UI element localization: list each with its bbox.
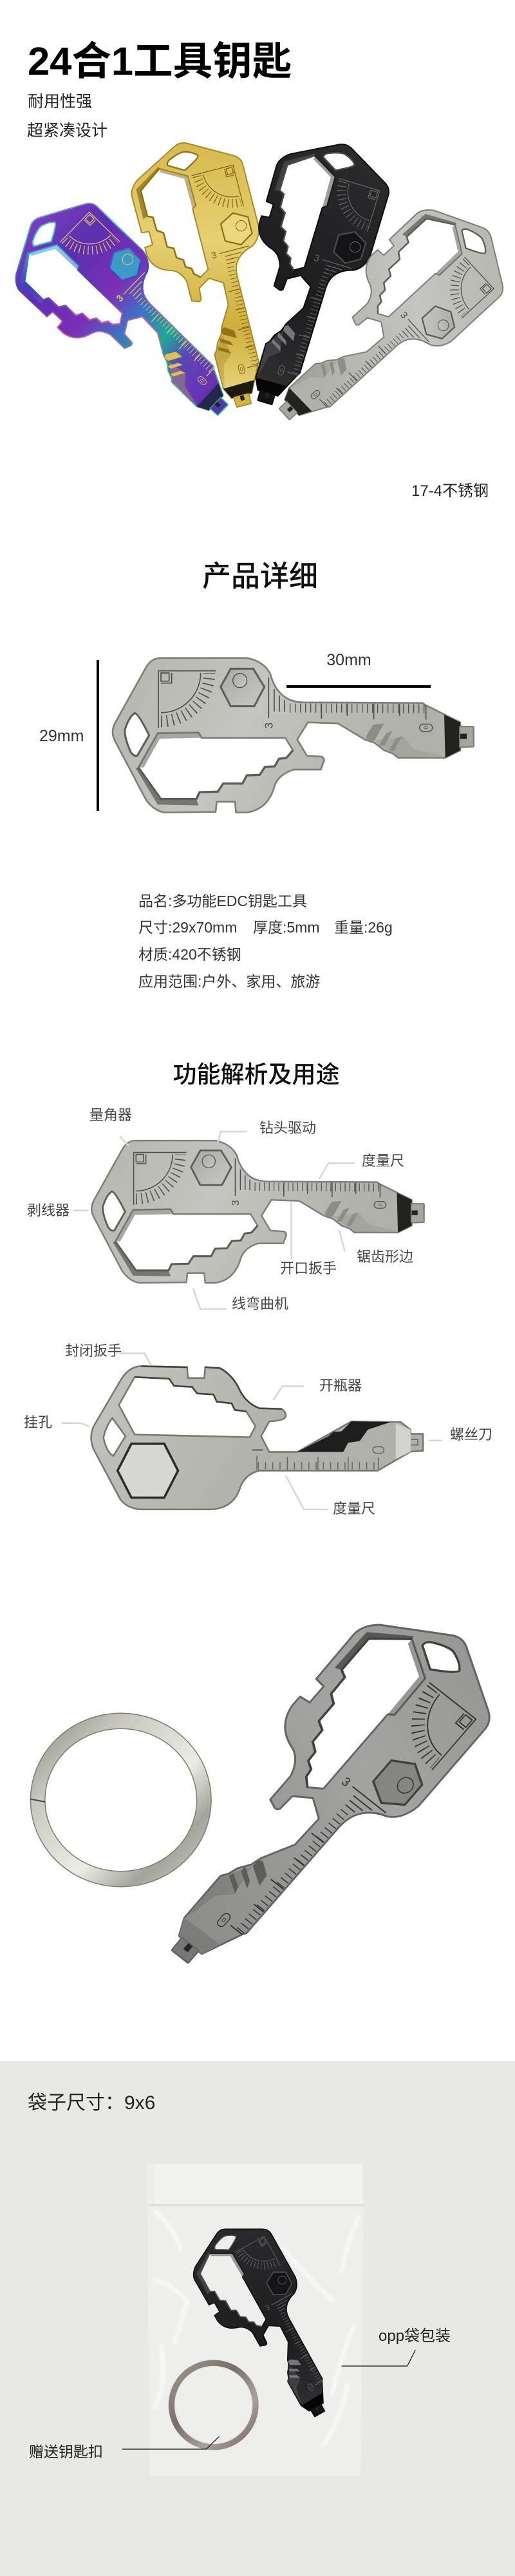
heading: product details: 产品详细: [202, 560, 318, 592]
subtitle: durability: 耐用性强: [28, 93, 92, 111]
bag: [147, 2164, 364, 2476]
key: black key in bag: [180, 2210, 359, 2436]
spec text block: 品名:多功能EDC钥匙工具: [138, 893, 307, 909]
heading: functions and uses: 功能解析及用途: [173, 1061, 340, 1088]
panel: opp bag with key and ring: [122, 2164, 415, 2476]
key: back view: [91, 1366, 423, 1510]
spec text block: 材质:420不锈钢: [138, 946, 241, 963]
callout labels: front view: 度量尺: [362, 1153, 404, 1169]
key: rainbow: 3: [115, 293, 126, 304]
key ring: [30, 1713, 211, 1887]
panel: front view with callouts: [27, 1107, 424, 1312]
spec text block: 尺寸:29x70mm: [138, 919, 237, 936]
dimension: 29mm: [39, 660, 99, 811]
key: gold: [122, 129, 301, 419]
key: gold: 3: [210, 249, 218, 261]
key: gold: 0: [239, 366, 244, 373]
dimension: 30mm: [286, 651, 431, 688]
callout labels: front view: 量角器: [89, 1107, 132, 1123]
label: free key ring: 赠送钥匙扣: [29, 2443, 103, 2460]
panel: four coloured keys: [0, 128, 515, 458]
spec text block: 重量:26g: [334, 919, 393, 936]
callout labels: front view: 线弯曲机: [232, 1296, 288, 1312]
callout labels: back view: 挂孔: [24, 1414, 52, 1430]
spec text block: 应用范围:户外、家用、旅游: [138, 973, 320, 990]
dimension: 29mm: 29mm: [39, 727, 84, 745]
key: black key in bag: 3: [264, 2304, 272, 2313]
spec text block: 厚度:5mm: [253, 919, 319, 936]
key: large angled view: 0: [220, 1915, 228, 1924]
dimension: 30mm: 30mm: [326, 651, 371, 669]
key: rainbow: 0: [199, 377, 205, 384]
subtitle: compact design: 超紧凑设计: [27, 122, 108, 140]
key: front view dimensioned: 3: [262, 723, 275, 728]
callout labels: front view: 锯齿形边: [357, 1249, 413, 1265]
key: front view: 3: [230, 1200, 241, 1206]
key: black key in bag: 0: [308, 2384, 313, 2390]
key: front view dimensioned: [113, 658, 474, 813]
key: grey: 3: [398, 310, 409, 321]
material label: 17-4不锈钢: [411, 482, 489, 500]
callout labels: front view: 钻头驱动: [259, 1120, 316, 1136]
spec text block: [138, 893, 393, 990]
key: rainbow: [0, 182, 263, 450]
leader: bag: [342, 2350, 415, 2366]
panel: packaging background: [0, 2061, 515, 2576]
key: grey: 0: [312, 392, 319, 398]
key: black: 3: [312, 252, 321, 265]
callout labels: back view: 开瓶器: [319, 1378, 362, 1394]
key: black: 0: [279, 366, 284, 374]
bag size label: 袋子尺寸：9x6: [28, 2092, 155, 2114]
panel: back view with callouts: [24, 1343, 492, 1517]
callout labels: front view: 开口扳手: [280, 1260, 337, 1276]
panel: key with key ring: [30, 1587, 515, 2007]
key: large angled view: 3: [339, 1775, 353, 1790]
callout leaders: front view: [73, 1132, 355, 1309]
callout labels: back view: [24, 1343, 492, 1517]
key: large angled view: [118, 1587, 515, 2007]
callout labels: front view: 剥线器: [27, 1202, 70, 1218]
key: front view: [91, 1141, 424, 1283]
key: front view: 0: [377, 1203, 383, 1206]
callout leaders: back view: [61, 1354, 442, 1510]
callout labels: back view: 度量尺: [333, 1501, 375, 1517]
label: opp bag: opp袋包装: [379, 2327, 451, 2345]
callout labels: back view: 螺丝刀: [450, 1426, 492, 1443]
key: grey: [245, 186, 515, 458]
key ring in bag: [172, 2363, 256, 2447]
leader: ring: [122, 2436, 219, 2449]
callout labels: back view: 封闭扳手: [65, 1343, 122, 1359]
callout labels: front view: [27, 1107, 413, 1312]
key: front view dimensioned: 0: [422, 726, 429, 730]
key: black: [211, 128, 398, 419]
title: 24合1工具钥匙: [28, 39, 292, 84]
